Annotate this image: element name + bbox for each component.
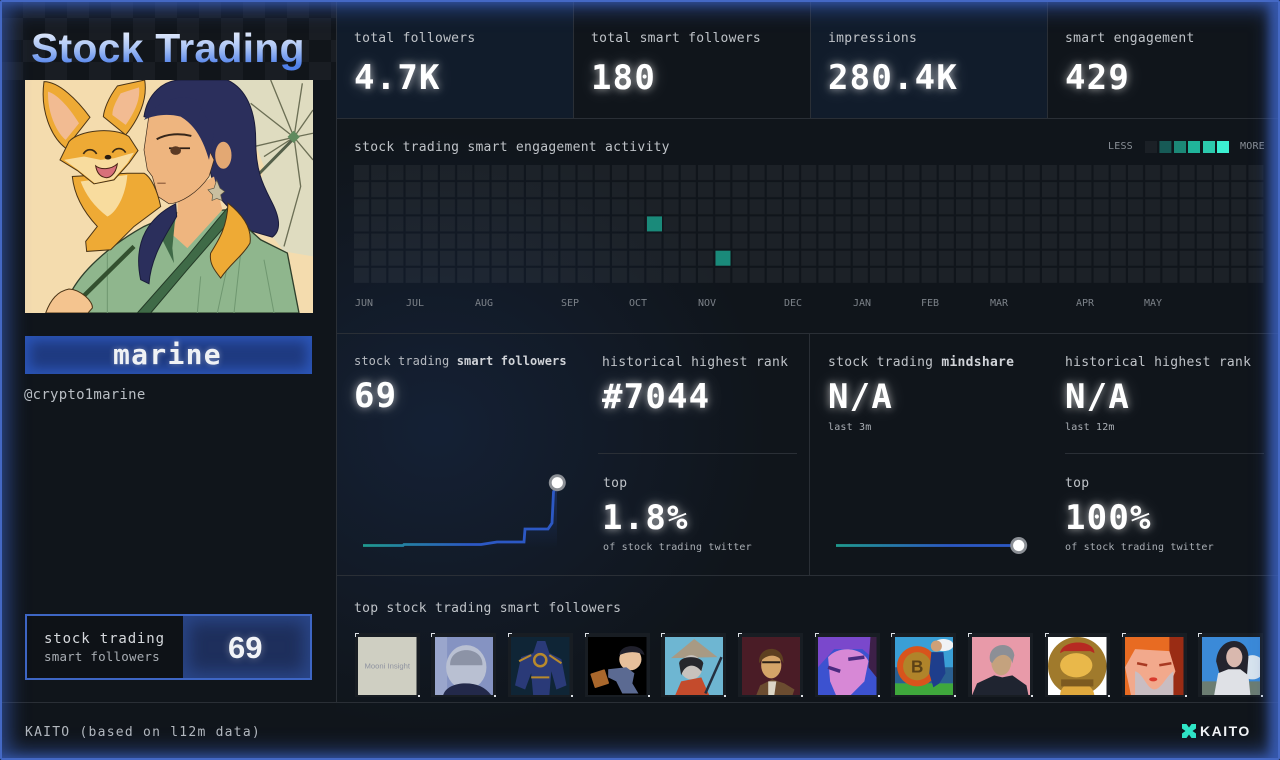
avatar 2: [431, 633, 496, 697]
stat label: total smart followers: [591, 31, 761, 46]
stat: total followers: [350, 31, 475, 98]
label: top: top: [1065, 476, 1089, 490]
month axis: AUG: [475, 298, 493, 309]
heading: top stock trading smart followers: top stock trading smart followers: [354, 601, 621, 616]
fox ears: [43, 82, 90, 148]
value: N/A: N/A: [828, 377, 893, 417]
heading: stock trading smart followers: stock trading smart followers: [354, 354, 567, 368]
avatar 1: [354, 633, 420, 697]
fox head: [60, 131, 138, 184]
stat: total smart followers: [588, 31, 761, 98]
stat background 3: [810, 0, 1047, 118]
panel: profile sidebar: [0, 0, 336, 680]
face: [144, 113, 214, 204]
heading: stock trading mindshare: stock trading mindshare: [828, 354, 1014, 370]
stat value: 180: [591, 58, 656, 98]
footer note: KAITO (based on l12m data): [25, 724, 261, 740]
value: percent: 100%: [1065, 498, 1152, 538]
month axis: FEB: [921, 298, 939, 309]
month axis: SEP: [561, 298, 579, 309]
avatar 11: [1122, 633, 1186, 697]
name bar: [25, 336, 312, 374]
checker pattern behind title: [0, 0, 336, 80]
avatar 10: [1045, 633, 1110, 697]
month axis: MAR: [990, 298, 1008, 309]
legend more label: MORE: [1240, 141, 1265, 152]
label: top: top: [603, 476, 627, 490]
value: rank: #7044: [602, 377, 710, 417]
handle: @crypto1marine: [24, 387, 146, 403]
month axis: OCT: [629, 298, 647, 309]
value: 69: 69: [354, 376, 397, 416]
earring: [208, 180, 224, 200]
badge: smart followers: [25, 614, 312, 680]
avatar 6: [738, 633, 803, 697]
avatar 4: [585, 633, 650, 697]
fox body: [72, 173, 160, 251]
logo: KAITO: [1182, 723, 1251, 739]
title: Stock Trading: Stock Trading: [31, 25, 305, 71]
avatar 12: [1198, 633, 1263, 697]
robe: [72, 210, 298, 313]
stat label: impressions: [828, 31, 917, 46]
note: of stock trading twitter: of stock trading twitter: [603, 542, 752, 552]
panel: engagement activity heatmap: [354, 140, 1265, 309]
month axis: MAY: [1144, 298, 1162, 309]
month axis: JUL: [406, 298, 424, 309]
avatar 9: [968, 633, 1033, 697]
stat: smart engagement: [1060, 31, 1195, 98]
badge sublabel: smart followers: [44, 648, 160, 664]
stat value: 280.4K: [828, 58, 958, 98]
heatmap heading: stock trading smart engagement activity: [354, 140, 670, 154]
stat: impressions: [824, 31, 962, 98]
heatmap grid: [354, 165, 1263, 283]
logo wordmark: KAITO: [1200, 723, 1251, 739]
month axis: JUN: [355, 298, 373, 309]
name: marine: marine: [113, 338, 222, 371]
note: last 12m: last 12m: [1065, 422, 1115, 432]
badge value panel: [183, 616, 310, 678]
neck and chest: [170, 177, 222, 248]
note: of stock trading twitter: of stock trading twitter: [1065, 542, 1214, 552]
avatar 7: [815, 633, 880, 697]
avatar 5: [661, 633, 726, 697]
badge label: stock trading: [44, 631, 165, 647]
legend: [1108, 141, 1265, 153]
badge number: 69: [228, 630, 262, 665]
stat label: total followers: [354, 31, 475, 46]
golden hair tip: [210, 203, 250, 278]
month axis: JAN: [853, 298, 871, 309]
line chart: smart followers trend: [363, 474, 566, 547]
avatar 1: Mooni Insight: [364, 661, 411, 670]
panel: mindshare rank: [822, 354, 1264, 554]
panel: top stats row: [337, 6, 1047, 118]
line chart: mindshare trend: [836, 537, 1028, 554]
avatar 8: [891, 633, 956, 697]
legend swatches: [1145, 141, 1229, 153]
legend less label: LESS: [1108, 141, 1133, 152]
month axis: [355, 298, 1162, 309]
footer: [25, 723, 1251, 740]
logo mark: [1182, 724, 1196, 738]
heading: historical highest rank: historical highest rank: [602, 354, 788, 370]
hair front lock: [138, 204, 176, 284]
value: percent: 1.8%: [602, 498, 689, 538]
stick and hand: [84, 246, 134, 296]
stat background 1: [336, 0, 573, 118]
portrait: fox and character illustration: [25, 80, 313, 313]
stat value: 429: [1065, 58, 1130, 98]
heading: historical highest rank: historical highest rank: [1065, 354, 1251, 370]
stat label: smart engagement: [1065, 31, 1195, 46]
avatar 3: [508, 633, 573, 697]
panel: smart followers rank: [349, 354, 797, 552]
stat value: 4.7K: [354, 58, 441, 98]
month axis: DEC: [784, 298, 802, 309]
value: N/A: N/A: [1065, 377, 1130, 417]
avatar 8: B: [911, 656, 923, 676]
hair back: [144, 80, 278, 237]
month axis: APR: [1076, 298, 1094, 309]
background glow: [336, 0, 1280, 760]
month axis: NOV: [698, 298, 716, 309]
note: last 3m: last 3m: [828, 422, 871, 432]
